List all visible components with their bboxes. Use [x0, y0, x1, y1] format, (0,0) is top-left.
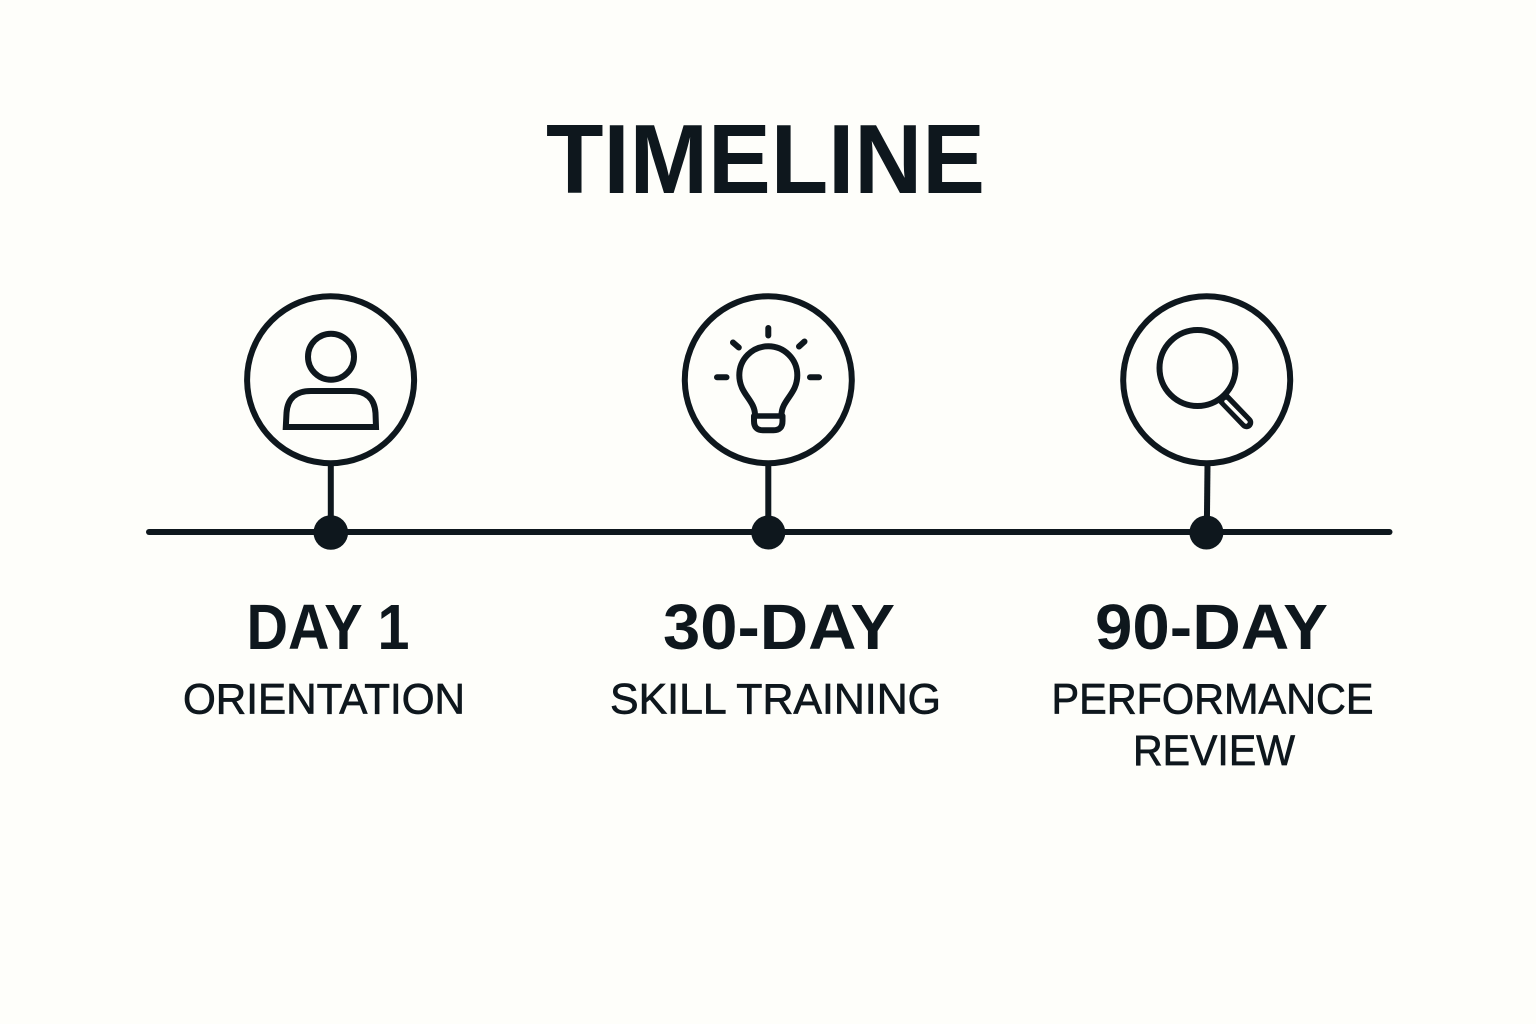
icon: light bulb in circle: [685, 296, 852, 463]
connector: [328, 465, 334, 532]
title: TIMELINE: [546, 104, 985, 214]
connector: [765, 465, 771, 532]
icon: magnifying glass in circle: [1123, 296, 1290, 463]
milestone: 30-day: [610, 296, 941, 724]
label: skill training: SKILL TRAINING: [610, 676, 941, 724]
heading: 90-day: 90-DAY: [1095, 591, 1328, 663]
heading: day 1: DAY 1: [246, 591, 410, 663]
icon: person in circle: [247, 296, 414, 463]
label: orientation: ORIENTATION: [183, 676, 465, 724]
milestone: day 1: [183, 296, 465, 724]
timeline node: [1189, 516, 1223, 550]
label: performance review: [1052, 676, 1374, 775]
label: performance review: REVIEW: [1133, 727, 1295, 775]
timeline node: [751, 516, 785, 550]
milestone: 90-day: [1052, 296, 1374, 775]
timeline node: [314, 515, 348, 550]
label: performance review: PERFORMANCE: [1052, 676, 1374, 724]
connector: [1204, 465, 1210, 532]
heading: 30-day: 30-DAY: [663, 591, 895, 663]
timeline axis: [149, 529, 1390, 535]
